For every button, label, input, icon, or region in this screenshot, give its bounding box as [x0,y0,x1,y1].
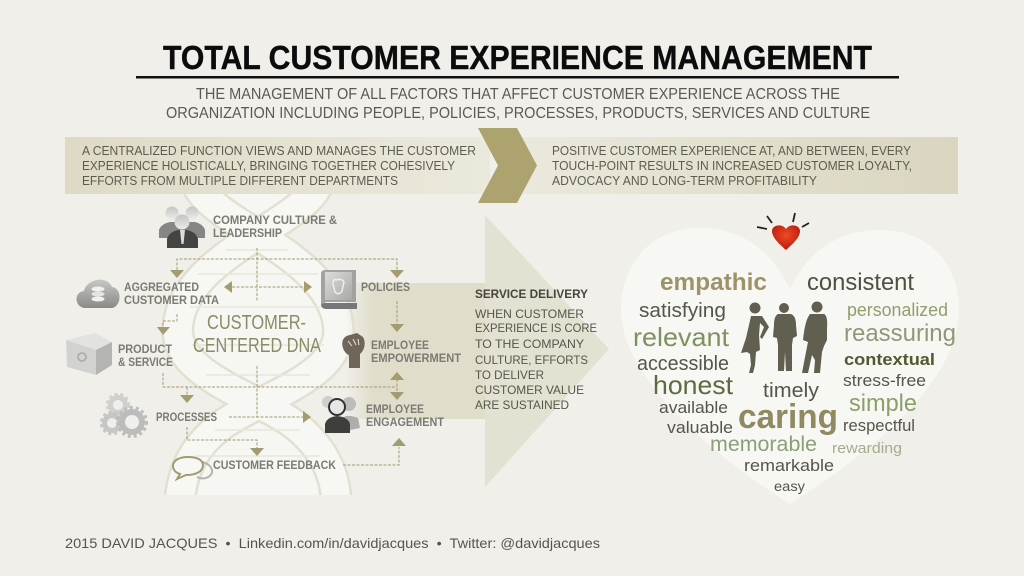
connectors: dashed flow arrows [163,248,399,465]
right band text: POSITIVE CUSTOMER EXPERIENCE AT, AND BETWEEN, EVERY [552,144,912,158]
label: company culture [213,215,337,240]
word cloud: memorable [710,433,817,456]
panel: top band right [520,137,958,194]
text block: service delivery: EXPERIENCE IS CORE [475,321,597,335]
text block: service delivery: ARE SUSTAINED [475,398,569,412]
right band text [552,144,912,188]
label: employee engagement [366,404,444,429]
label: employee empowerment [371,340,461,365]
footer: 2015 DAVID JACQUES • Linkedin.com/in/davidjacques • Twitter: @davidjacques [65,535,600,551]
word cloud: valuable [667,418,733,437]
label: customer-centered DNA [193,312,322,357]
label: employee engagement: ENGAGEMENT [366,417,444,429]
right band text: ADVOCACY AND LONG-TERM PROFITABILITY [552,174,818,188]
word cloud: easy [774,478,805,494]
label: customer-centered DNA: CENTERED DNA [193,335,322,357]
label: aggregated customer data [124,282,219,307]
text block: service delivery: SERVICE DELIVERY [475,287,588,301]
label: company culture: LEADERSHIP [213,228,282,240]
word cloud: accessible [637,353,729,375]
label: product and service: PRODUCT [118,344,172,356]
label: employee engagement: EMPLOYEE [366,404,424,416]
word cloud: contextual [844,350,935,369]
panel: heart background [621,228,959,504]
word cloud: personalized [847,300,948,320]
text block: service delivery: TO THE COMPANY [475,337,584,351]
word cloud: reassuring [844,320,956,347]
title: TOTAL CUSTOMER EXPERIENCE MANAGEMENT [163,39,872,76]
arrow: chevron [478,128,537,203]
label: product and service [118,344,173,369]
word cloud: empathic [660,269,767,296]
icon: data cloud [76,280,120,308]
word cloud: stress-free [843,371,926,390]
word cloud: rewarding [832,440,902,457]
panel: service delivery arrow [345,215,609,487]
icon: small red heart with rays [757,213,809,250]
word cloud: caring [738,398,838,436]
left band text: A CENTRALIZED FUNCTION VIEWS AND MANAGES THE CUSTOMER [82,144,476,158]
word cloud: remarkable [744,456,834,475]
word cloud: timely [763,380,819,402]
icon: three silhouettes [741,302,827,373]
text block: service delivery: CULTURE, EFFORTS [475,353,588,367]
icon: feedback speech bubbles [173,457,212,479]
icon: employee engagement people [322,396,360,433]
word cloud: relevant [633,322,730,352]
subtitle: THE MANAGEMENT OF ALL FACTORS THAT AFFECT CUSTOMER EXPERIENCE ACROSS THE [196,86,840,103]
text block: service delivery [475,287,597,412]
label: employee empowerment: EMPOWERMENT [371,353,461,365]
label: company culture: COMPANY CULTURE & [213,215,337,227]
label: aggregated customer data: AGGREGATED [124,282,199,294]
left band text: EFFORTS FROM MULTIPLE DIFFERENT DEPARTMENTS [82,174,398,188]
label: processes: PROCESSES [156,412,217,424]
left band text: EXPERIENCE HOLISTICALLY, BRINGING TOGETHER COHESIVELY [82,159,456,173]
word cloud: respectful [843,416,915,435]
panel: top band left [65,137,490,194]
word cloud: available [659,398,728,417]
icon: policies book [321,270,357,309]
connector arrowheads [157,270,406,456]
label: customer feedback: CUSTOMER FEEDBACK [213,460,337,472]
word cloud [633,269,956,494]
label: aggregated customer data: CUSTOMER DATA [124,295,219,307]
word cloud: satisfying [639,300,726,322]
icon: leadership people [159,206,205,248]
text block: service delivery: CUSTOMER VALUE [475,383,584,397]
label: product and service: & SERVICE [118,357,173,369]
label: policies: POLICIES [361,282,410,294]
icon: product box [66,333,112,375]
text block: service delivery: TO DELIVER [475,368,544,382]
label: customer-centered DNA: CUSTOMER- [207,312,306,334]
left band text [82,144,476,188]
word cloud: consistent [807,269,914,296]
word cloud: simple [849,390,917,417]
icon: employee empowerment fist [342,333,365,368]
subtitle: ORGANIZATION INCLUDING PEOPLE, POLICIES, PROCESSES, PRODUCTS, SERVICES AND CULTURE [166,105,870,122]
panel: DNA helix background [178,185,338,500]
text block: service delivery: WHEN CUSTOMER [475,307,584,321]
word cloud: honest [653,370,734,400]
icon: processes gears [101,394,146,436]
right band text: TOUCH-POINT RESULTS IN INCREASED CUSTOMER LOYALTY, [552,159,912,173]
label: employee empowerment: EMPLOYEE [371,340,429,352]
subtitle [166,86,870,122]
